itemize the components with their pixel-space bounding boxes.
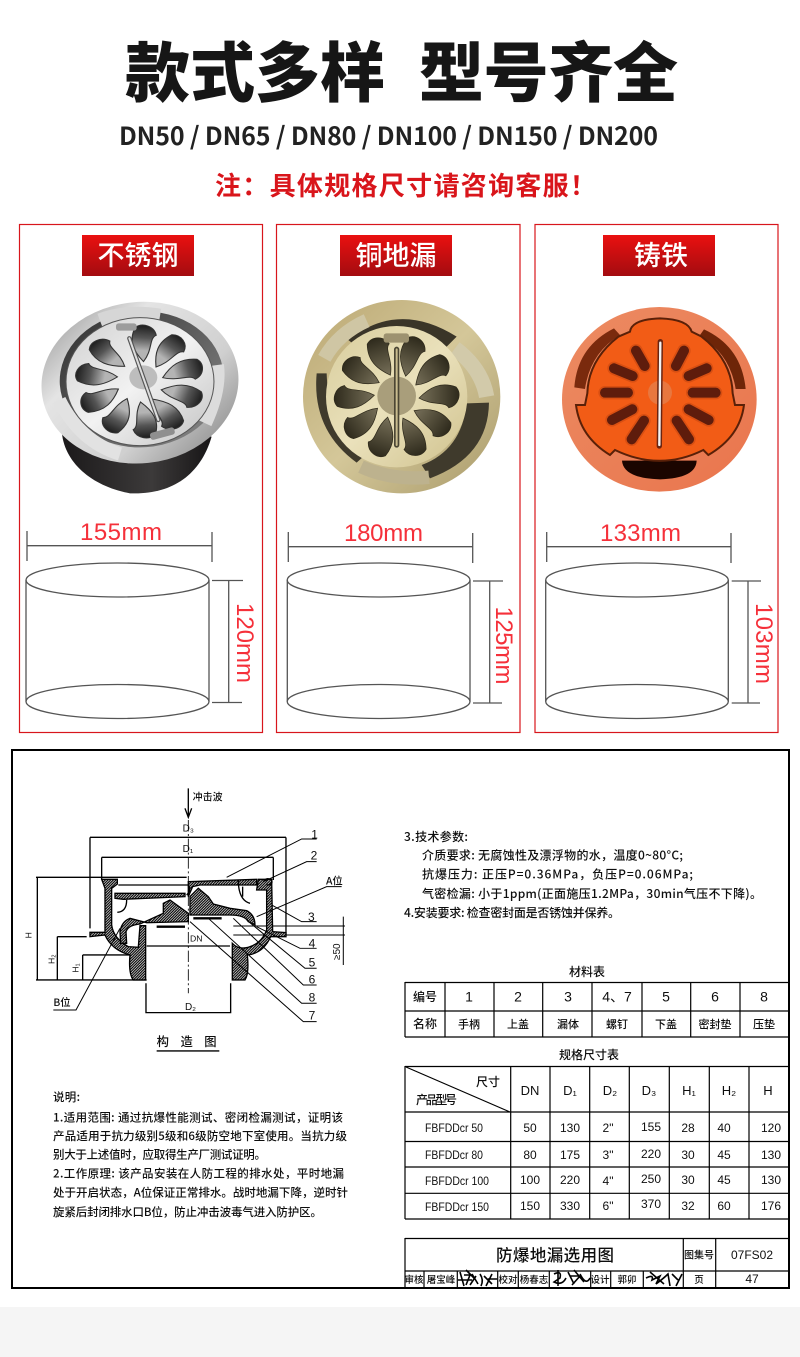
- table rows: [425, 1120, 781, 1214]
- part numbers and labels: 6: [309, 973, 316, 987]
- table header cells: D₁: [563, 1083, 577, 1098]
- table rows: 30: [681, 1148, 695, 1162]
- part numbers and labels: D₃: [183, 824, 194, 835]
- dimension: height 120mm: [212, 580, 258, 702]
- table cells: 上盖: [507, 1016, 529, 1032]
- table header cells: DN: [521, 1083, 539, 1098]
- table cells: 名称: [413, 1015, 437, 1032]
- table cells: 漏体: [557, 1016, 579, 1032]
- sign-off row: 杨春志: [520, 1272, 549, 1286]
- structural cross-section diagram: [23, 788, 345, 1051]
- table header cells: H: [763, 1083, 773, 1098]
- bottom grey band: [0, 1307, 800, 1357]
- notes: description: 产品适用于抗力级别5级和6级防空地下室使用。当抗力级: [53, 1128, 348, 1144]
- red note: 注：具体规格尺寸请咨询客服！: [215, 166, 596, 203]
- dimension: height 125mm: [473, 581, 517, 703]
- sign-off row: 设计: [590, 1272, 610, 1286]
- table cells: 1: [465, 988, 473, 1004]
- notes: description: 别大于上述值时，应取得生产厂测试证明。: [53, 1146, 266, 1162]
- sign-off row: 审核: [404, 1272, 424, 1286]
- notes: technical parameters: [404, 828, 762, 921]
- notes: technical parameters: 抗爆压力: 正压P=0.36MPa，负压P=0.06MPa;: [422, 866, 693, 882]
- part numbers and labels: D₂: [185, 1002, 196, 1013]
- title: [125, 21, 678, 115]
- panel: copper: [276, 224, 520, 732]
- table header cells: H₁: [682, 1083, 696, 1098]
- notes: technical parameters: 3.技术参数:: [404, 828, 468, 845]
- dimension: height 103mm: 103mm: [750, 603, 777, 684]
- table grid: [405, 982, 788, 1037]
- label: cast iron: [603, 234, 715, 276]
- sign-off row: 屠宝峰: [427, 1272, 456, 1286]
- part numbers and labels: D₁: [183, 844, 194, 855]
- dimension: height 103mm: [732, 581, 777, 703]
- part numbers and labels: ≥50: [332, 943, 343, 960]
- label: cast iron: 铸铁: [634, 234, 688, 273]
- table rows: FBFDDcr 50: [425, 1121, 483, 1135]
- title block: [404, 1238, 788, 1287]
- label: stainless steel: 不锈钢: [98, 234, 178, 273]
- product photo: stainless floor drain: [33, 292, 247, 493]
- table cells: 5: [662, 988, 670, 1004]
- notes: technical parameters: 气密检漏: 小于1ppm(正面施压1.2MPa，30min气压不下降)。: [422, 885, 762, 902]
- table header cells: 尺寸: [476, 1073, 500, 1090]
- table rows: 100: [520, 1173, 540, 1187]
- table rows: 28: [681, 1121, 695, 1135]
- dimension: width 155mm: [27, 519, 212, 562]
- table rows: 32: [681, 1199, 695, 1213]
- subtitle: model sizes: DN50 / DN65 / DN80 / DN100 / DN150 / DN200: [119, 117, 658, 153]
- left lower cover: [120, 900, 188, 943]
- left body section: [90, 879, 146, 980]
- right body section: [232, 879, 286, 980]
- table rows: 175: [560, 1148, 580, 1162]
- part numbers and labels: 4: [309, 936, 316, 950]
- table rows: 4": [603, 1174, 613, 1188]
- diagram caption: 构造图: [157, 1032, 217, 1050]
- table rows: 220: [641, 1147, 661, 1161]
- title block: 图集号: [684, 1246, 714, 1262]
- table rows: 130: [761, 1173, 781, 1187]
- cylinder outline: [26, 563, 209, 718]
- table cells: 压垫: [753, 1016, 775, 1032]
- top cover section: [188, 879, 257, 897]
- table cells: 4、7: [602, 988, 632, 1004]
- panel: technical drawing sheet: [12, 750, 789, 1288]
- table rows: 45: [717, 1148, 731, 1162]
- part numbers and labels: [23, 824, 343, 1022]
- table rows: 120: [761, 1121, 781, 1135]
- table rows: 6": [603, 1199, 613, 1213]
- table cells: 2: [514, 988, 522, 1004]
- table rows: FBFDDcr 80: [425, 1148, 483, 1162]
- part numbers and labels: H₂: [47, 954, 57, 964]
- table header cells: 产品型号: [416, 1091, 457, 1108]
- table: specifications: [405, 1046, 788, 1219]
- label: copper: [340, 234, 452, 276]
- table cells: 编号: [413, 988, 437, 1005]
- cylinder outline: [287, 563, 470, 718]
- table cells: 密封垫: [698, 1016, 732, 1032]
- notes: description: 1.适用范围: 通过抗爆性能测试、密闭检漏测试，证明该: [53, 1110, 343, 1126]
- dimension: width 155mm: 155mm: [80, 519, 162, 546]
- dimension: width 133mm: [547, 520, 731, 563]
- part numbers and labels: B位: [53, 994, 71, 1009]
- table rows: 30: [681, 1173, 695, 1187]
- table rows: 330: [560, 1199, 580, 1213]
- title: 款式多样: [125, 21, 385, 115]
- table rows: 2": [603, 1121, 613, 1135]
- outer dimension lines: [36, 820, 345, 1013]
- table rows: 130: [560, 1121, 580, 1135]
- table rows: 370: [641, 1197, 661, 1211]
- table header cells: D₃: [642, 1083, 656, 1098]
- dimension: width 133mm: 133mm: [600, 520, 681, 547]
- table cells: 6: [711, 988, 719, 1004]
- table rows: 80: [523, 1148, 537, 1162]
- sign-off row: 47: [745, 1272, 759, 1286]
- notes: description: 2.工作原理: 该产品安装在人防工程的排水处，平时地漏: [53, 1166, 344, 1182]
- dimension: width 180mm: [288, 520, 473, 563]
- product photo: cast iron floor drain: [562, 307, 757, 492]
- table rows: 130: [761, 1148, 781, 1162]
- part numbers and labels: 8: [309, 991, 316, 1005]
- panel: cast iron: [535, 224, 778, 732]
- table rows: 45: [717, 1173, 731, 1187]
- table cells: 3: [564, 988, 572, 1004]
- table header cells: D₂: [603, 1083, 617, 1098]
- part numbers and labels: H: [23, 932, 33, 938]
- label: stainless steel: [82, 234, 194, 276]
- table rows: 150: [520, 1199, 540, 1213]
- dimension: height 125mm: 125mm: [490, 606, 517, 684]
- panel: stainless steel: [20, 224, 262, 732]
- dimension: height 120mm: 120mm: [231, 603, 258, 683]
- table rows: 3": [603, 1148, 613, 1162]
- sign-off row: 页: [694, 1272, 704, 1286]
- centre plug section: [190, 888, 255, 925]
- leader lines: [53, 839, 342, 1022]
- notes: description: [53, 1089, 348, 1220]
- table title: 规格尺寸表: [559, 1046, 619, 1063]
- table rows: 176: [761, 1199, 781, 1213]
- title block: 07FS02: [731, 1248, 773, 1262]
- table rows: 220: [560, 1173, 580, 1187]
- part numbers and labels: 5: [309, 956, 316, 970]
- title block grid: [405, 1238, 788, 1287]
- dimension: width 180mm: 180mm: [344, 520, 423, 547]
- table rows: 50: [523, 1121, 537, 1135]
- cylinder outline: [546, 563, 728, 718]
- table cells: 8: [760, 988, 768, 1004]
- drawing name: 防爆地漏选用图: [496, 1242, 614, 1266]
- table header cells: H₂: [722, 1083, 736, 1098]
- sign-off row: 郭卯: [617, 1272, 637, 1286]
- table cells: 螺钉: [606, 1016, 628, 1032]
- table rows: 40: [717, 1121, 731, 1135]
- part numbers and labels: 1: [311, 827, 318, 841]
- part numbers and labels: DN: [190, 933, 202, 943]
- table rows: 155: [641, 1120, 661, 1134]
- handwritten signatures: [458, 1270, 682, 1286]
- table title: 材料表: [569, 963, 605, 980]
- notes: description: 处于开启状态，A位保证正常排水。战时地漏下降，逆时针: [53, 1184, 348, 1200]
- shock wave arrow: 冲击波: [193, 789, 223, 804]
- table rows: FBFDDcr 150: [425, 1200, 489, 1214]
- table header cells: [416, 1073, 773, 1108]
- part numbers and labels: H₁: [71, 963, 81, 973]
- table cells: 下盖: [655, 1016, 677, 1032]
- notes: description: 旋紧后封闭排水口B位，防止冲击波毒气进入防护区。: [53, 1204, 322, 1220]
- notes: technical parameters: 4.安装要求: 检查密封面是否锈蚀并保养。: [404, 904, 620, 921]
- table rows: 60: [717, 1199, 731, 1213]
- table grid: [405, 1066, 788, 1219]
- sign-off row: [404, 1272, 759, 1286]
- part numbers and labels: 7: [309, 1008, 316, 1022]
- sign-off row: 校对: [498, 1272, 518, 1286]
- shock wave arrow: [185, 788, 223, 817]
- title: 型号齐全: [419, 21, 678, 115]
- table: materials: [405, 963, 788, 1037]
- table cells: 手柄: [458, 1016, 480, 1032]
- label: copper: 铜地漏: [356, 234, 436, 273]
- table rows: 250: [641, 1172, 661, 1186]
- product photo: copper floor drain: [303, 300, 500, 493]
- table rows: FBFDDcr 100: [425, 1174, 489, 1188]
- notes: description: 说明:: [53, 1089, 80, 1105]
- table cells: [413, 988, 775, 1032]
- part numbers and labels: 2: [311, 848, 318, 862]
- part numbers and labels: 3: [308, 910, 315, 924]
- notes: technical parameters: 介质要求: 无腐蚀性及漂浮物的水，温度0~80°C;: [422, 846, 683, 864]
- part numbers and labels: A位: [326, 872, 343, 887]
